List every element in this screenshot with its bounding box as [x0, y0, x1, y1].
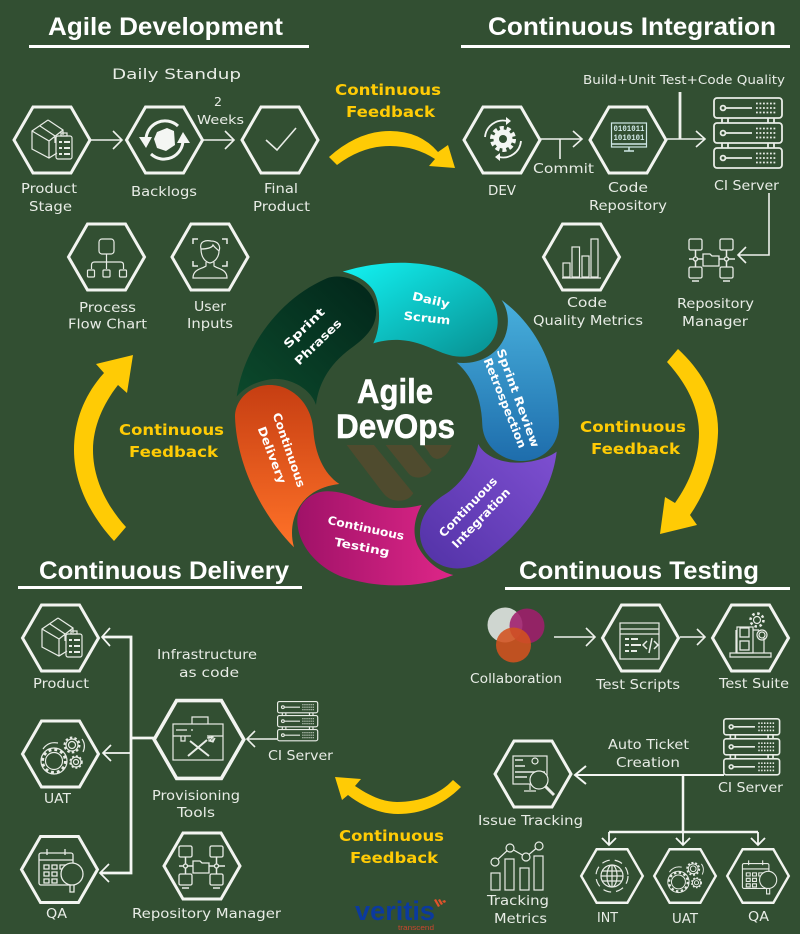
- segment: Continuous Testing: [297, 491, 453, 585]
- segment: Sprint Review Retrospection: Retrospection: [481, 356, 529, 450]
- segment: Sprint Phrases: [237, 276, 376, 405]
- section: Continuous Integration: [461, 13, 790, 330]
- heading: Agile Development: Agile Development: [48, 13, 284, 41]
- segment: Continuous Testing: Continuous: [326, 513, 406, 543]
- segment: Daily Scrum: [343, 263, 498, 357]
- step: QA: QA: [748, 909, 770, 925]
- step: Product Stage: Stage: [29, 199, 72, 215]
- segment: Continuous Delivery: Delivery: [255, 424, 289, 486]
- segment: Continuous Integration: [420, 444, 557, 568]
- step: Collaboration: Collaboration: [470, 671, 562, 687]
- label: Continuous Feedback top: Feedback: [346, 103, 436, 121]
- label: Auto Ticket Creation: Auto Ticket: [608, 737, 689, 753]
- step: UAT: [22, 721, 98, 807]
- label: Commit: Commit: [533, 161, 594, 177]
- step: CI Server (testing): CI Server: [718, 780, 783, 796]
- step: Process Flow Chart: [68, 224, 147, 332]
- section: Continuous Delivery: [18, 557, 333, 922]
- arrow: feedback left: [74, 355, 133, 541]
- label: Continuous Feedback right: Continuous: [580, 418, 686, 436]
- step: Provisioning Tools: Provisioning: [152, 788, 240, 804]
- step: User Inputs: User: [194, 299, 226, 315]
- segment: Continuous Integration: Continuous: [436, 474, 500, 540]
- segment: Continuous Delivery: [235, 385, 339, 547]
- label: Infrastructure as code: Infrastructure: [157, 647, 257, 663]
- step: UAT: UAT: [44, 791, 72, 807]
- step: Code Repository: 1010101: [614, 133, 644, 143]
- label: Continuous Feedback right: [580, 418, 686, 458]
- label: Continuous Feedback bottom: [339, 827, 444, 867]
- section: Continuous Testing: [470, 557, 790, 927]
- label: Continuous Feedback left: [119, 421, 224, 461]
- label: Continuous Feedback left: Continuous: [119, 421, 224, 439]
- step: QA: [727, 849, 789, 925]
- step: Product Stage: [14, 107, 90, 215]
- step: Repository Manager: Manager: [682, 314, 748, 330]
- label: Daily Standup: Daily Standup: [112, 67, 241, 83]
- segment: Daily Scrum: Scrum: [403, 309, 451, 327]
- step: INT: INT: [597, 910, 619, 926]
- label: Auto Ticket Creation: Creation: [616, 755, 680, 771]
- heading: Continuous Integration: Continuous Integration: [488, 13, 776, 41]
- segment: Sprint Phrases: Sprint: [280, 304, 328, 351]
- step: Tracking Metrics: Tracking: [486, 893, 549, 909]
- step: User Inputs: [172, 224, 248, 332]
- segment: Continuous Testing: Testing: [333, 535, 391, 559]
- logo: veritis transcend: transcend: [398, 923, 434, 932]
- step: Process Flow Chart: Flow Chart: [68, 316, 147, 332]
- step: Repository Manager: Repository Manager: [132, 906, 281, 922]
- arrows: CI flow: [540, 92, 769, 263]
- label: Continuous Feedback right: Feedback: [591, 440, 681, 458]
- step: Final Product: Product: [253, 199, 310, 215]
- label: 2 Weeks: [197, 94, 244, 127]
- step: Process Flow Chart: Process: [79, 300, 136, 316]
- step: Collaboration: [470, 608, 562, 687]
- step: QA: QA: [46, 906, 68, 922]
- center title: DevOps: [336, 408, 455, 446]
- arrow: feedback bottom: [335, 777, 461, 814]
- step: CI Server: CI Server: [714, 178, 779, 194]
- step: CI Server (delivery): [247, 702, 333, 764]
- step: Final Product: [242, 107, 318, 215]
- label: Continuous Feedback bottom: Continuous: [339, 827, 444, 845]
- arrows: delivery bracket: [100, 628, 154, 882]
- step: Test Suite: Test Suite: [718, 676, 789, 692]
- heading: Continuous Integration: [461, 13, 790, 48]
- step: Repository Manager: [132, 833, 281, 922]
- step: Product Stage: Product: [21, 181, 77, 197]
- step: DEV: [464, 107, 540, 199]
- step: CI Server (testing): [718, 719, 783, 796]
- arrow: feedback right: [660, 349, 718, 534]
- section: Agile Development: [14, 13, 318, 332]
- segment: Daily Scrum: Daily: [411, 289, 452, 311]
- step: CI Server: [714, 98, 782, 194]
- step: Provisioning Tools: Tools: [176, 805, 215, 821]
- step: User Inputs: Inputs: [187, 316, 233, 332]
- step: DEV: DEV: [488, 183, 517, 199]
- label: Continuous Feedback left: Feedback: [129, 443, 219, 461]
- label: Continuous Feedback bottom: Feedback: [350, 849, 439, 867]
- label: Build+Unit Test+Code Quality: Build+Unit Test+Code Quality: [583, 72, 786, 87]
- step: Test Scripts: [595, 605, 680, 693]
- step: Issue Tracking: Issue Tracking: [478, 813, 583, 829]
- label: Infrastructure as code: as code: [179, 665, 239, 681]
- heading: Continuous Delivery: Continuous Delivery: [39, 557, 289, 585]
- step: Code Quality Metrics: [533, 224, 643, 329]
- label: 2 Weeks: 2: [214, 94, 222, 109]
- center title: Agile: [357, 373, 433, 411]
- logo: veritis transcend: veritis: [355, 896, 435, 926]
- step: Issue Tracking: [478, 741, 583, 829]
- heading: Continuous Testing: Continuous Testing: [519, 557, 759, 585]
- step: Product: Product: [33, 676, 89, 692]
- segment: Sprint Phrases: Phrases: [292, 316, 345, 368]
- step: Repository Manager: Repository: [677, 296, 754, 312]
- arrows: agile flow: [90, 131, 234, 149]
- label: 2 Weeks: Weeks: [197, 112, 244, 127]
- segment: Continuous Integration: Integration: [449, 485, 513, 551]
- segment: Continuous Delivery: Continuous: [270, 411, 308, 489]
- segment: Sprint Review Retrospection: [457, 300, 559, 461]
- arrow: feedback top: [329, 131, 455, 168]
- arrows: testing flow: [554, 628, 705, 646]
- step: UAT: [654, 849, 716, 927]
- step: QA: [22, 836, 98, 922]
- step: CI Server (delivery): CI Server: [268, 748, 333, 764]
- step: Tracking Metrics: [486, 842, 549, 927]
- step: Test Suite: [712, 605, 789, 692]
- step: Code Quality Metrics: Quality Metrics: [533, 313, 643, 329]
- step: Test Scripts: Test Scripts: [595, 677, 680, 693]
- label: Continuous Feedback top: [335, 81, 441, 121]
- arrows: ticket routing: [575, 766, 765, 845]
- step: Backlogs: Backlogs: [131, 184, 197, 200]
- ring diagram: Agile DevOps: [235, 263, 559, 585]
- step: INT: [581, 849, 643, 926]
- heading: Agile Development: [29, 13, 309, 48]
- step: Backlogs: [126, 107, 202, 200]
- step: Code Repository: Code: [608, 180, 648, 196]
- step: Repository Manager: [677, 239, 754, 330]
- step: Code Repository: Repository: [589, 198, 667, 214]
- step: Code Repository: [589, 107, 667, 214]
- heading: Continuous Testing: [505, 557, 790, 590]
- step: Code Repository: 0101011: [614, 124, 644, 134]
- step: Code Quality Metrics: Code: [567, 295, 607, 311]
- label: Infrastructure as code: [157, 647, 257, 681]
- step: Product: [22, 605, 98, 692]
- label: Continuous Feedback top: Continuous: [335, 81, 441, 99]
- step: Provisioning Tools: [152, 701, 244, 821]
- center title: [336, 373, 455, 446]
- step: Final Product: Final: [264, 181, 298, 197]
- segment: Sprint Review Retrospection: Sprint Review: [494, 347, 543, 450]
- label: Auto Ticket Creation: [608, 737, 689, 771]
- step: Tracking Metrics: Metrics: [494, 911, 547, 927]
- watermark logo: [347, 445, 452, 501]
- step: UAT: UAT: [672, 911, 699, 927]
